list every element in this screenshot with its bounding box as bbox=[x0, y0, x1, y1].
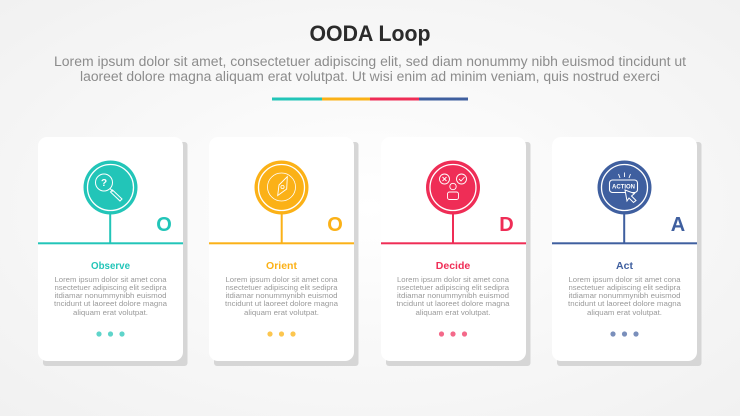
body text: itdiamar nonummynibh euismod bbox=[226, 291, 338, 300]
body text: itdiamar nonummynibh euismod bbox=[568, 291, 680, 300]
subtitle bbox=[54, 54, 686, 84]
body text: aliquam erat volutpat. bbox=[73, 308, 148, 317]
letter D: D bbox=[499, 214, 514, 236]
panel: orient bbox=[209, 137, 358, 366]
subtitle: laoreet dolore magna aliquam erat volutpat. Ut wisi enim ad minim veniam, quis nostrud exerci bbox=[80, 69, 660, 84]
body text: aliquam erat volutpat. bbox=[587, 308, 662, 317]
body text bbox=[396, 275, 510, 317]
dots bbox=[96, 331, 125, 337]
body text: tncidunt ut laoreet dolore magna bbox=[54, 299, 168, 308]
dots bbox=[439, 331, 467, 337]
icon: magnifying glass with question mark: ? bbox=[101, 178, 107, 189]
icon: magnifying glass with question mark bbox=[84, 160, 138, 214]
panel: observe bbox=[38, 137, 188, 366]
colour divider bbox=[272, 98, 468, 100]
letter A: A bbox=[671, 214, 685, 236]
body text: itdiamar nonummynibh euismod bbox=[397, 291, 509, 300]
panel: decide bbox=[381, 137, 530, 366]
body text bbox=[568, 275, 682, 317]
letter O: O bbox=[327, 214, 343, 236]
body text: aliquam erat volutpat. bbox=[416, 308, 490, 317]
body text: nsectetuer adipiscing elit sedipra bbox=[54, 283, 167, 292]
icon: person deciding bbox=[426, 160, 480, 214]
body text: Lorem ipsum dolor sit amet cona bbox=[568, 275, 681, 284]
body text: itdiamar nonummynibh euismod bbox=[54, 291, 166, 300]
letter O: O bbox=[156, 214, 172, 236]
body text: aliquam erat volutpat. bbox=[244, 308, 319, 317]
icon: compass bbox=[254, 160, 308, 214]
body text: Lorem ipsum dolor sit amet cona bbox=[226, 275, 338, 284]
body text: tncidunt ut laoreet dolore magna bbox=[396, 299, 510, 308]
subtitle: Lorem ipsum dolor sit amet, consectetuer adipiscing elit, sed diam nonummy nibh euismod tincidunt ut bbox=[54, 54, 686, 69]
panel: act bbox=[552, 137, 702, 366]
heading: Act bbox=[616, 260, 633, 272]
icon: action button with cursor: ACTION bbox=[612, 184, 636, 190]
body text: nsectetuer adipiscing elit sedipra bbox=[226, 283, 338, 292]
heading: Decide bbox=[436, 260, 470, 272]
icon: action button with cursor bbox=[598, 160, 652, 214]
heading: Orient bbox=[266, 260, 297, 272]
body text bbox=[225, 275, 339, 317]
body text: tncidunt ut laoreet dolore magna bbox=[225, 299, 339, 308]
dots bbox=[610, 331, 639, 337]
body text: Lorem ipsum dolor sit amet cona bbox=[397, 275, 510, 284]
heading: Observe bbox=[91, 260, 130, 272]
body text: nsectetuer adipiscing elit sedipra bbox=[397, 283, 510, 292]
body text: nsectetuer adipiscing elit sedipra bbox=[568, 283, 681, 292]
body text: Lorem ipsum dolor sit amet cona bbox=[54, 275, 167, 284]
body text bbox=[54, 275, 168, 317]
dots bbox=[267, 331, 296, 337]
title: OODA Loop bbox=[310, 21, 430, 46]
body text: tncidunt ut laoreet dolore magna bbox=[568, 299, 682, 308]
